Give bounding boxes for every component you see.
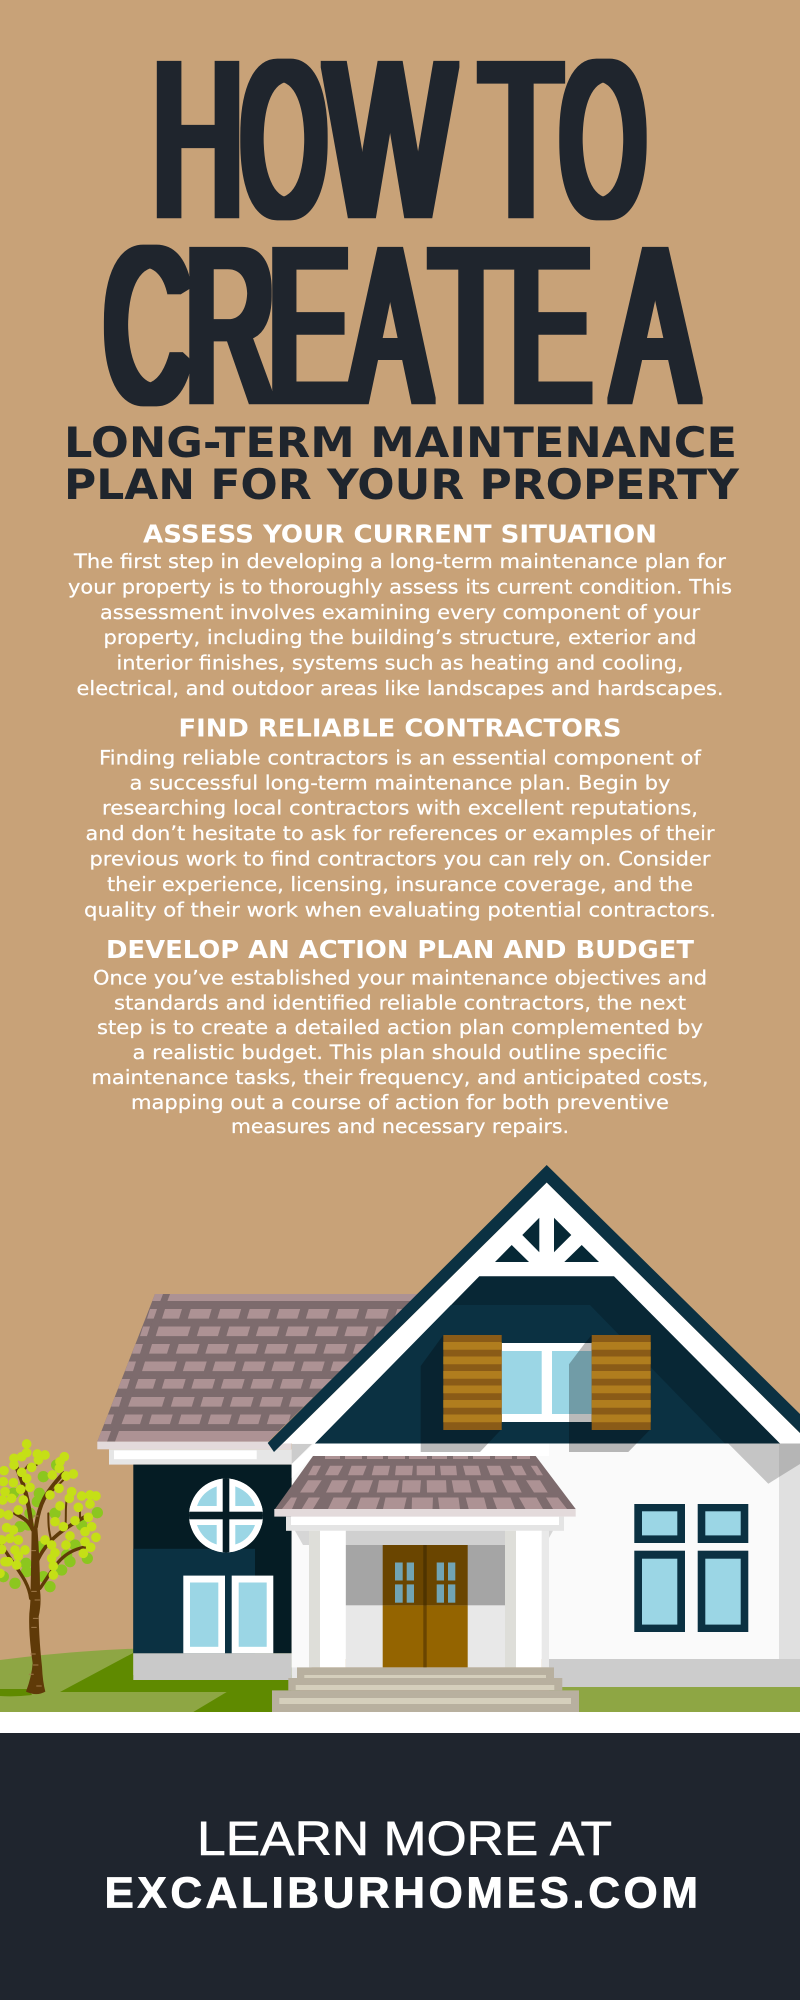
footer call to action: LEARN MORE AT [197,1813,612,1866]
title: E [511,203,591,449]
body text: contractors [84,747,716,922]
body text: action plan: Once you’ve established your maintenance objectives and [93,967,707,990]
subtitle [64,418,740,509]
left wing roof [90,1294,430,1442]
shutter shadows [421,1335,651,1452]
title: T [430,203,511,449]
body text: assess: electrical, and outdoor areas like landscapes and hardscapes. [76,677,724,700]
body text: assess: property, including the building’s structure, exterior and [104,626,696,649]
title: O [241,17,326,263]
heading: assess: ASSESS YOUR CURRENT SITUATION [143,520,657,549]
right windows [634,1504,748,1632]
tree [0,1444,97,1694]
gable window [502,1343,592,1422]
section: develop an action plan and budget [92,935,708,1138]
body text: action plan: mapping out a course of action for both preventive [131,1091,669,1114]
section: find reliable contractors [84,714,716,922]
title: R [186,203,274,449]
body text: action plan [92,967,708,1138]
gable [268,1165,800,1452]
title: C [104,203,189,449]
title: W [327,17,453,263]
title [104,17,703,449]
body text: contractors: previous work to find contractors you can rely on. Consider [90,848,712,870]
title: T [480,17,561,263]
ground [0,1648,800,1712]
double window [183,1576,273,1653]
heading: contractors: FIND RELIABLE CONTRACTORS [178,714,622,742]
front leaves [0,1444,96,1575]
title: H [153,17,242,263]
body text: assess: The first step in developing a long-term maintenance plan for [73,550,727,573]
porch back wall [346,1545,505,1667]
title: A [614,203,696,449]
main wall [292,1444,800,1687]
body text: assess: your property is to thoroughly assess its current condition. This [68,575,732,598]
section: assess your current situation [68,520,732,700]
title: E [269,203,349,449]
shutters [443,1335,651,1430]
title: A [351,203,429,449]
white band [0,1712,800,1733]
body text: action plan: standards and identified reliable contractors, the next [114,992,686,1015]
body text: contractors: a successful long-term maintenance plan. Begin by [130,772,670,795]
footer panel [0,1733,800,2000]
back leaves [3,1465,97,1587]
footer website: EXCALIBURHOMES.COM [104,1869,698,1918]
body text: contractors: and don’t hesitate to ask for references or examples of their [86,822,716,845]
body text: assess: interior finishes, systems such as heating and cooling, [116,652,684,675]
house [90,1165,800,1712]
body text: assess: assessment involves examining every component of your [100,601,701,624]
body text: action plan: a realistic budget. This plan should outline specific [132,1041,668,1064]
porch columns [309,1531,549,1667]
porch beam and brackets [286,1517,564,1667]
body text: contractors: quality of their work when evaluating potential contractors. [84,898,716,922]
trunk and branches [2,1457,88,1694]
left wing eave [97,1442,292,1465]
body text: contractors: their experience, licensing, insurance coverage, and the [107,873,693,896]
body text: assess [68,550,732,700]
porch [274,1456,576,1667]
body text: action plan: maintenance tasks, their frequency, and anticipated costs, [92,1066,708,1089]
left wing wall [133,1465,292,1680]
body text: contractors: Finding reliable contractors is an essential component of [99,747,702,770]
porch roof [274,1456,576,1517]
title: O [561,17,645,263]
heading: action plan: DEVELOP AN ACTION PLAN AND BUDGET [106,935,694,964]
door [383,1545,468,1667]
body text: contractors: researching local contractors with excellent reputations, [102,796,698,820]
porch steps [272,1667,579,1712]
infographic canvas [0,426,800,2000]
round window [188,1478,264,1553]
subtitle: LONG-TERM MAINTENANCE [64,418,737,467]
body text: action plan: step is to create a detailed action plan complemented by [97,1016,703,1039]
subtitle: PLAN FOR YOUR PROPERTY [64,460,740,509]
body text: action plan: measures and necessary repairs. [231,1115,569,1138]
